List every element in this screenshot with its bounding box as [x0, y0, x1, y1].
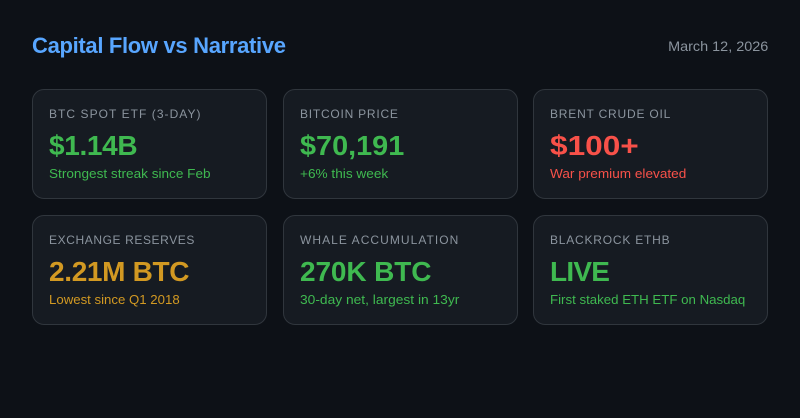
panel: Bitcoin price: $70,191	[300, 130, 404, 161]
panel: BlackRock ETHB: BLACKROCK ETHB	[550, 233, 670, 247]
panel: Brent crude oil: War premium elevated	[550, 166, 686, 181]
panel: Whale accumulation: 270K BTC	[300, 256, 431, 287]
panel: Exchange reserves: Lowest since Q1 2018	[49, 292, 180, 307]
panel: Whale accumulation: 30-day net, largest in 13yr	[300, 292, 459, 307]
panel: Exchange reserves: EXCHANGE RESERVES	[49, 233, 195, 247]
panel: Brent crude oil	[533, 89, 768, 199]
title: Capital Flow vs Narrative	[32, 33, 286, 58]
panel: BlackRock ETHB	[533, 215, 768, 325]
panel: Exchange reserves	[32, 215, 267, 325]
panel: BTC spot ETF: BTC SPOT ETF (3-DAY)	[49, 107, 202, 121]
panel: BTC spot ETF	[32, 89, 267, 199]
panel: BlackRock ETHB: First staked ETH ETF on Nasdaq	[550, 292, 745, 307]
panel: Bitcoin price	[283, 89, 518, 199]
panel: Brent crude oil: $100+	[550, 130, 639, 161]
panel: Whale accumulation: WHALE ACCUMULATION	[300, 233, 459, 247]
panel: BlackRock ETHB: LIVE	[550, 256, 609, 287]
panel: Whale accumulation	[283, 215, 518, 325]
panel: BTC spot ETF: $1.14B	[49, 130, 137, 161]
panel: Bitcoin price: BITCOIN PRICE	[300, 107, 399, 121]
panel: Exchange reserves: 2.21M BTC	[49, 256, 189, 287]
panel: BTC spot ETF: Strongest streak since Feb	[49, 166, 211, 181]
date: March 12, 2026	[668, 38, 768, 54]
panel: Bitcoin price: +6% this week	[300, 166, 388, 181]
panel: Brent crude oil: BRENT CRUDE OIL	[550, 107, 671, 121]
